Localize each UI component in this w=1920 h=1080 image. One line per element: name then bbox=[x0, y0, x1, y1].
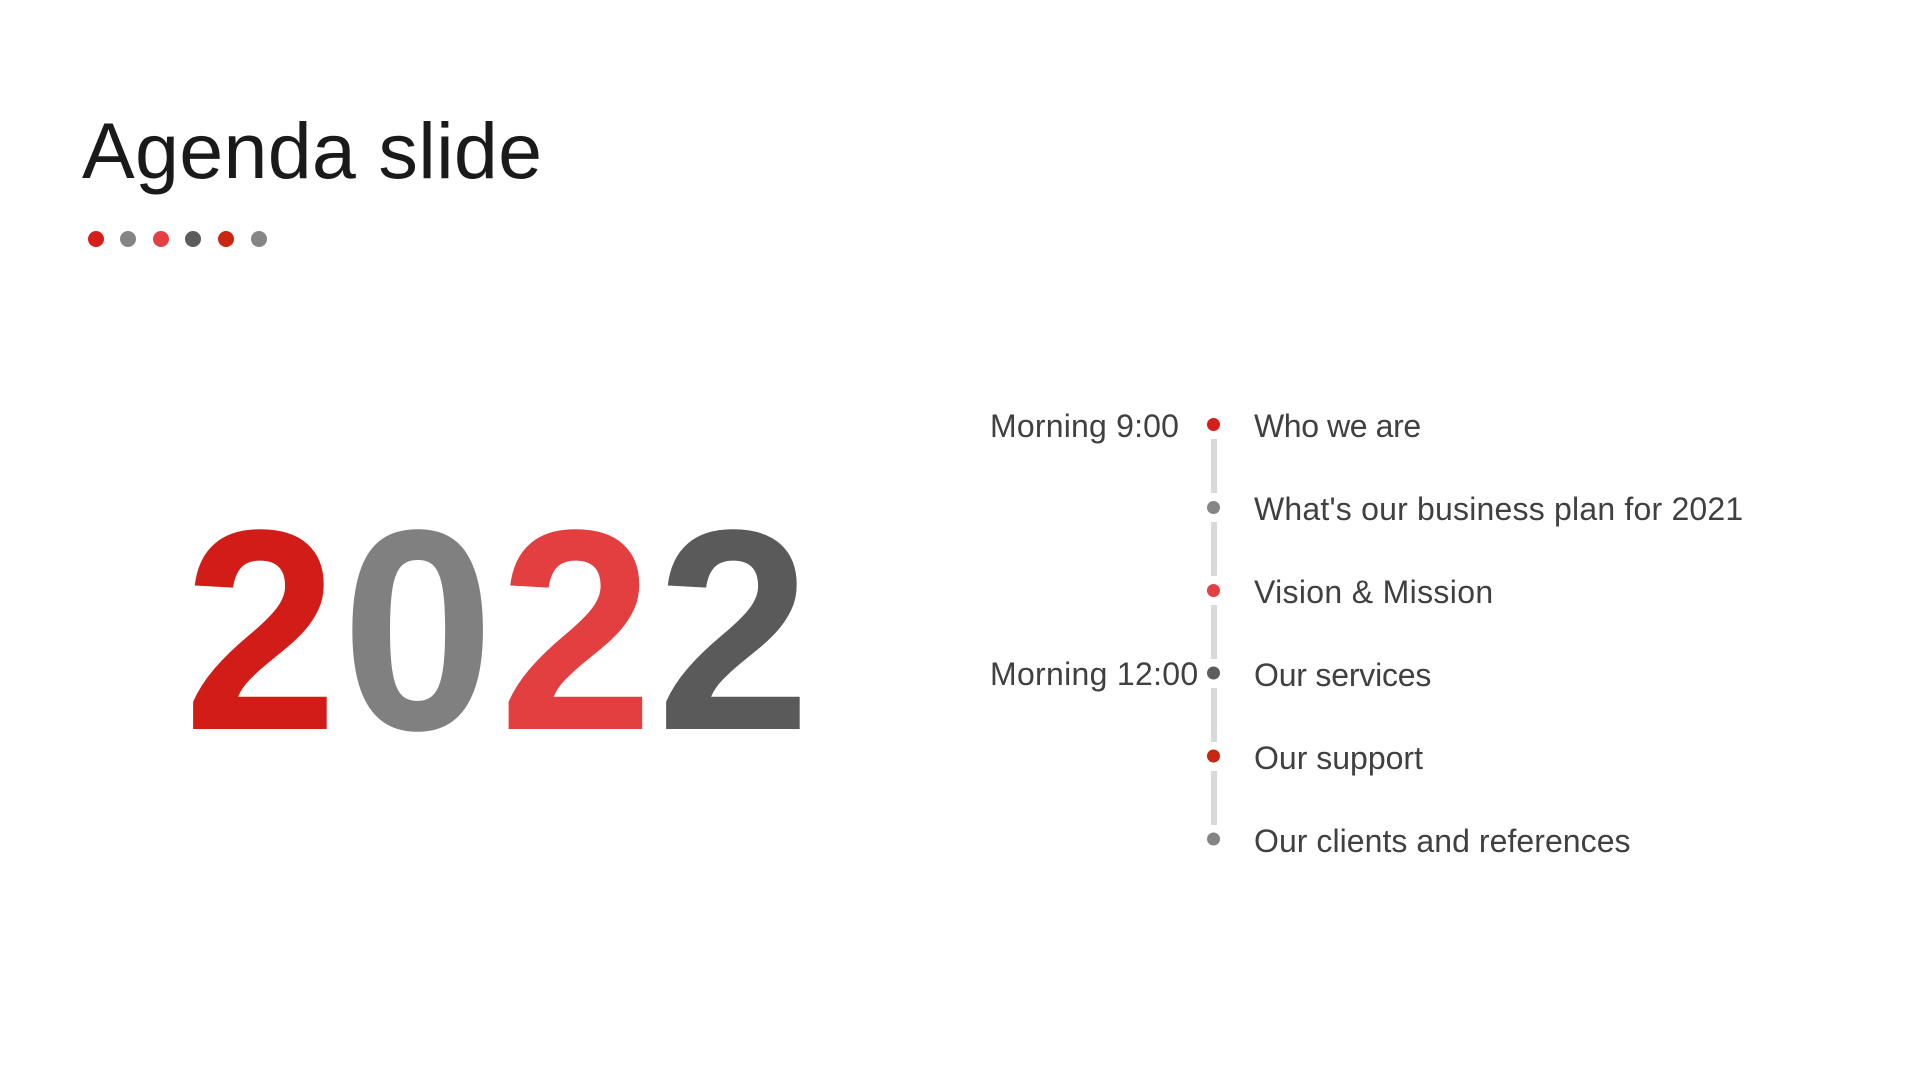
timeline item: Our clients and references: Our clients and references bbox=[1254, 823, 1631, 859]
year 2022 bbox=[184, 470, 811, 790]
timeline item: Vision and Mission: Vision & Mission bbox=[1254, 574, 1493, 610]
digit 2 dark grey: 2 bbox=[656, 470, 811, 790]
digit 2 light red: 2 bbox=[499, 470, 653, 790]
timeline item: business plan: What's our business plan for 2021 bbox=[1254, 491, 1743, 527]
digit 0 grey: 0 bbox=[342, 471, 494, 790]
timeline item: Who we are: Who we are bbox=[1254, 408, 1421, 444]
decorative dot row bbox=[88, 231, 267, 247]
time label: Morning 9:00: Morning 9:00 bbox=[990, 408, 1179, 444]
time label: Morning 12:00: Morning 12:00 bbox=[990, 656, 1198, 692]
title: Agenda slide bbox=[82, 106, 542, 195]
timeline item: Our services: Our services bbox=[1254, 657, 1431, 693]
timeline item: Our support: Our support bbox=[1254, 740, 1423, 776]
timeline connector bbox=[1211, 439, 1217, 825]
digit 2 red: 2 bbox=[184, 470, 338, 790]
